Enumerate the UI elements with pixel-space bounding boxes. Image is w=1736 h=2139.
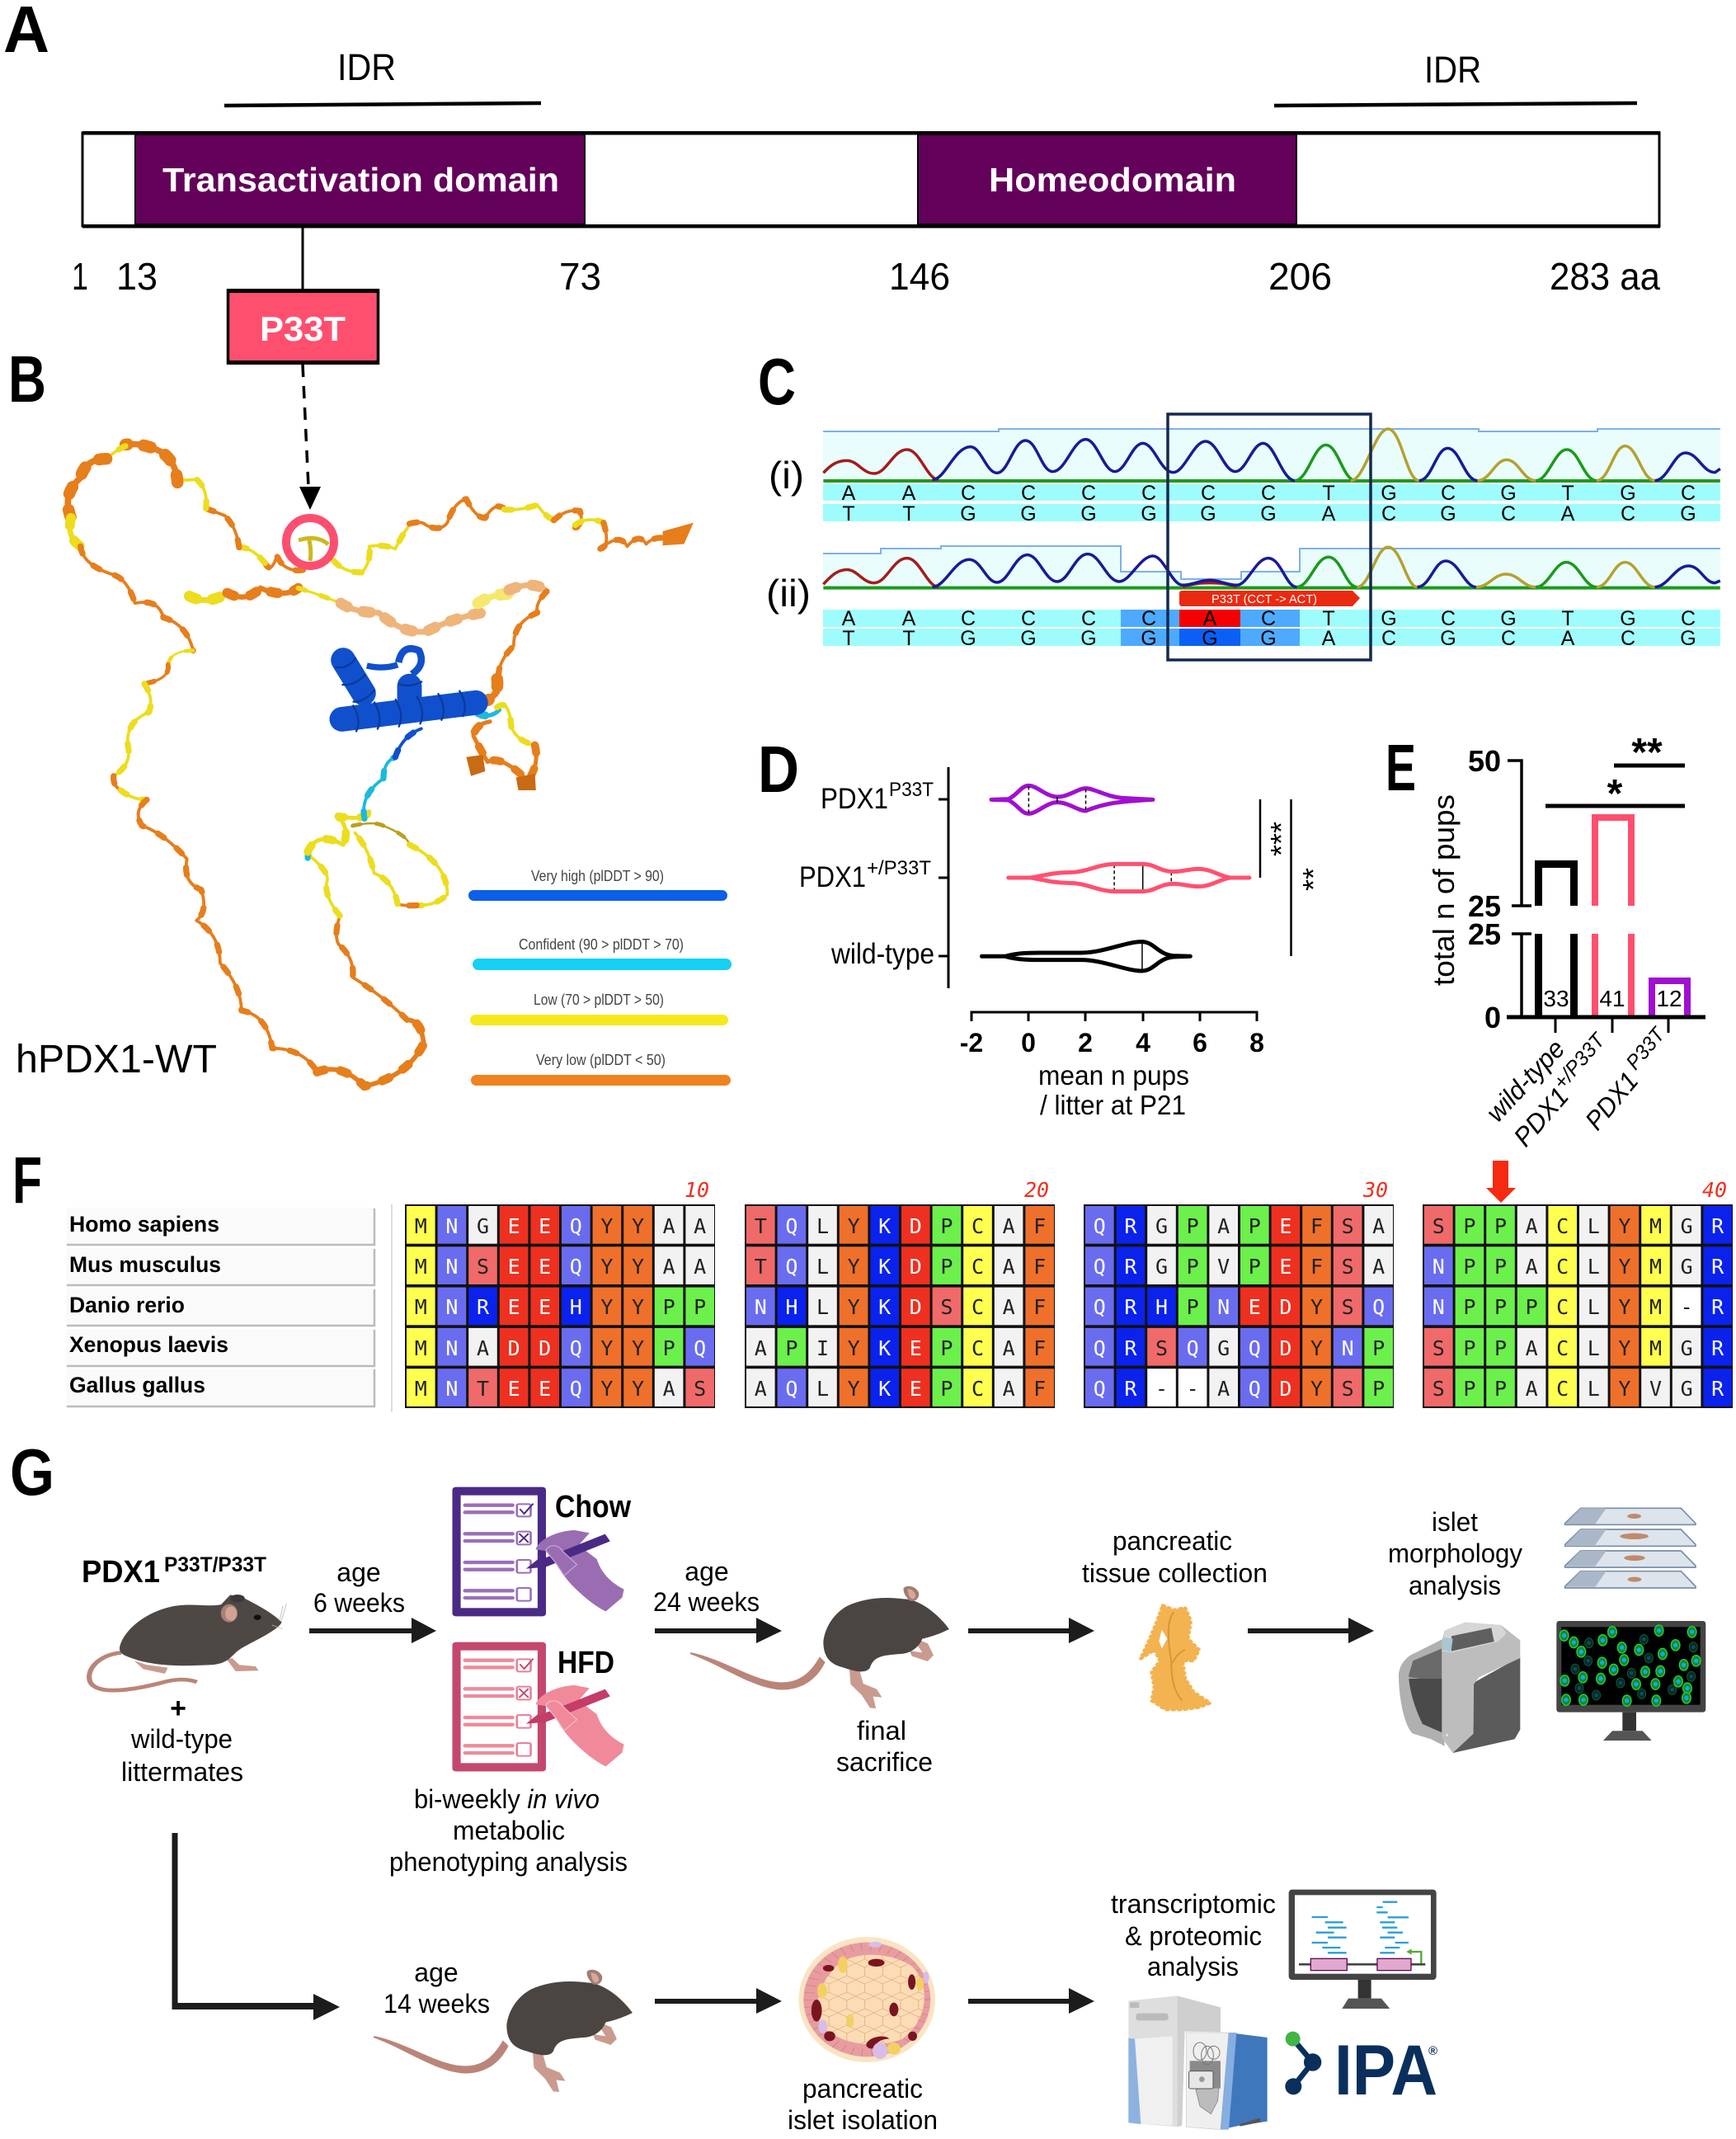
phenotyping caption: metabolic [453,1816,565,1845]
wild-type chromatogram (i): AACCCCCCTGCGTGC [842,482,1696,505]
residue numbers: 146 [889,255,950,298]
wild-type caption: littermates [121,1757,243,1787]
position numbers: 30 [1362,1178,1388,1202]
residue numbers: 73 [559,255,601,298]
panel letter F: F [12,1143,42,1217]
significance lines: ** [1631,731,1663,775]
wild-type caption: wild-type [130,1724,233,1754]
alignment block residues 11-20: T Q LY KD PCAF [755,1255,1046,1279]
domain bar: Homeodomain [989,161,1236,199]
P33T mutation box [227,228,379,365]
alignment block residues 1-10: M N G EEQ YYAA [415,1214,706,1238]
icon: HFD clipboard [452,1642,624,1771]
rotated group labels: PDX1 [1508,1081,1575,1152]
panel B: predicted protein structure [8,342,732,1086]
position numbers: 40 [1702,1178,1727,1202]
bar values: 12 [1656,986,1682,1011]
alignment block residues 21-30: QR --A QD YSP [1094,1377,1385,1401]
alignment block residues 21-30: QR GPVP E FSA [1094,1255,1385,1279]
tissue collection caption: pancreatic [1113,1526,1232,1556]
panel F: sequence alignment [12,1143,1733,1412]
IDR label right [1274,49,1637,106]
wild-type chromatogram (i): TTGGGGGGACGCACG [842,502,1696,525]
rotated group labels: P33T [1618,1022,1670,1078]
alignment block residues 1-10: M N S EEQ YYAA [415,1255,706,1279]
islet morphology caption [1388,1507,1522,1600]
P33T mutation box: P33T [260,309,346,348]
omics caption [1111,1889,1276,1981]
alignment block residues 11-20: APIY KE PCAF [755,1336,1046,1360]
IPA logo [1285,2031,1437,2110]
alignment block residues 31-40 [1423,1204,1733,1408]
alignment block residues 31-40: N PPACLYMG R [1433,1255,1724,1279]
category labels: P33T [889,779,934,801]
alignment block residues 1-10: M NREEH YYPP [415,1295,706,1319]
position numbers [685,1178,1727,1202]
category labels: wild-type [830,938,934,970]
wild-type caption: + [170,1693,186,1724]
age 6 weeks label: age [336,1557,381,1587]
tissue collection caption [1082,1526,1268,1588]
icon: sacrificed mouse [690,1586,949,1708]
panel G: experimental workflow [10,1435,1705,2135]
panel letter D: D [758,733,799,806]
icon: lower mouse [374,1970,633,2092]
final sacrifice caption [836,1716,933,1777]
age 6 weeks label: 6 weeks [313,1588,405,1618]
genotype label [82,1553,266,1590]
final sacrifice caption: final [857,1716,906,1746]
pLDDT legend: Confident (90 > plDDT > 70) [519,936,684,953]
alignment block residues 21-30 [1084,1204,1394,1408]
species names: Xenopus laevis [69,1332,228,1357]
axes [939,767,1264,1058]
category labels [799,779,934,970]
panel C: chromatograms [758,345,1720,660]
age 14 weeks label: age [414,1958,459,1987]
dashed arrow to P33T site [299,365,321,510]
arrow [655,1618,782,1643]
genotype label: PDX1 [82,1555,160,1590]
icon: chow clipboard [452,1487,624,1616]
arrow [655,1988,782,2014]
domain bar: Transactivation domain [162,161,559,199]
icon: pancreatic islet [798,1937,935,2062]
broken y axis: 25 [1468,917,1501,951]
HFD label: HFD [557,1646,614,1680]
alignment block residues 21-30: QR S Q G QD Y N P [1094,1336,1385,1360]
rotated group labels: wild-type [1480,1034,1570,1128]
x axis title: mean n pups [1038,1060,1189,1091]
phenotyping caption [389,1784,628,1877]
residue numbers [72,255,1660,298]
arrow [309,1618,436,1643]
residue numbers: 1 [72,255,88,298]
rotated group labels: PDX1 [1579,1063,1646,1135]
mutant chromatogram (ii) [823,546,1720,650]
position numbers: 20 [1024,1178,1049,1202]
significance brackets: *** [1264,822,1298,856]
axes: -2 [960,1028,983,1058]
wild-type chromatogram (i) [823,429,1720,525]
islet isolation caption [788,2074,938,2135]
IPA logo: ® [1428,2044,1437,2058]
bar values: 33 [1543,986,1569,1011]
broken y axis: 25 [1468,889,1501,923]
age 6 weeks label [313,1557,405,1618]
residue numbers: 206 [1268,255,1332,298]
violins [981,785,1249,971]
IDR label right: IDR [1424,49,1481,91]
significance brackets [1260,799,1330,956]
x axis title: / litter at P21 [1040,1090,1186,1120]
category labels: PDX1 [799,861,866,893]
rotated group labels: +/P33T [1549,1028,1611,1094]
alignment block residues 11-20 [745,1204,1055,1408]
age 14 weeks label: 14 weeks [383,1989,490,2019]
bar values: 41 [1599,986,1625,1011]
phenotyping caption: bi-weekly in vivo [414,1784,600,1814]
age 24 weeks label [653,1557,760,1617]
red arrow at residue 33 [1486,1161,1516,1203]
alignment block residues 31-40: SPPACLYMG R [1433,1336,1724,1360]
icon: slide scanner [1399,1623,1520,1753]
species names: Gallus gallus [69,1373,205,1397]
omics caption: analysis [1147,1952,1239,1981]
x axis title [1038,1060,1189,1120]
axes: 8 [1249,1028,1264,1058]
alignment block residues 1-10 [405,1204,715,1408]
protein ribbon [68,444,694,1086]
structure name: hPDX1-WT [16,1038,217,1081]
pLDDT legend: Low (70 > plDDT > 50) [534,992,664,1008]
panel D: violin plot [758,733,1330,1120]
omics caption: & proteomic [1125,1921,1262,1951]
arrow [968,1988,1094,2014]
significance lines [1545,731,1685,816]
icon: standing mouse [89,1595,286,1690]
rotated group labels [1480,1022,1678,1152]
icon: sequencing monitor [1289,1890,1437,2009]
arrow [1248,1618,1374,1643]
panel letter E: E [1386,731,1416,804]
icon: histology slides [1565,1508,1696,1588]
panel letter B: B [8,342,46,416]
IPA logo: IPA [1334,2031,1437,2110]
broken y axis: 0 [1484,1001,1501,1034]
pLDDT legend: Very high (plDDT > 90) [531,868,664,884]
x axis [1507,1015,1705,1020]
species names: Danio rerio [69,1293,185,1317]
arrow [968,1618,1094,1643]
islet morphology caption: islet [1432,1507,1478,1537]
panel letter C: C [758,345,796,418]
position numbers: 10 [685,1178,709,1202]
icon: mass spectrometer [1128,1995,1268,2130]
trace label (i): (i) [769,454,804,497]
alignment block residues 21-30: QR GPAP E FSA [1094,1214,1385,1238]
icon: fluorescence monitor [1556,1621,1705,1741]
alignment block residues 31-40: SPPACLYVG R [1433,1377,1724,1401]
islet isolation caption: pancreatic [802,2074,923,2104]
age 24 weeks label: age [685,1557,729,1586]
wild-type caption [121,1693,243,1787]
bar values [1543,986,1682,1011]
L-shaped arrow to lower path [172,1833,340,2020]
axes: 0 [1021,1028,1036,1058]
panel A: protein domain map [3,0,1660,365]
pLDDT legend [468,868,732,1086]
islet morphology caption: analysis [1409,1571,1501,1600]
alignment block residues 11-20: A Q LY KE PCAF [755,1377,1046,1401]
chow label: Chow [555,1490,631,1524]
tissue collection caption: tissue collection [1082,1558,1268,1588]
age 14 weeks label [383,1958,490,2019]
omics caption: transcriptomic [1111,1889,1276,1919]
y axis title: total n of pups [1427,794,1461,986]
P33T annotation arrow: P33T (CCT -> ACT) [1211,592,1317,606]
icon: pancreas [1141,1605,1210,1710]
genotype label: P33T/P33T [164,1553,266,1576]
category labels: PDX1 [821,783,888,815]
IDR label left [224,46,541,106]
bars [1535,814,1691,1017]
species names [66,1204,392,1412]
highlight box [1168,414,1371,660]
residue numbers: 13 [116,255,158,298]
phenotyping caption: phenotyping analysis [389,1847,628,1877]
mutant chromatogram (ii): AACCCCACTGCGTGC [842,607,1696,630]
species names: Homo sapiens [69,1212,219,1237]
domain bar [82,131,1660,228]
P33T annotation arrow [1179,591,1360,606]
trace label (ii): (ii) [766,572,811,615]
islet isolation caption: islet isolation [788,2105,938,2135]
panel E: bar chart total pups [1386,731,1705,1152]
species names: Mus musculus [69,1252,221,1277]
residue numbers: 283 aa [1550,255,1660,298]
P33T site circle [286,518,334,566]
alignment block residues 31-40: SPPACLYMG R [1433,1214,1724,1238]
mutant chromatogram (ii): TTGGGGGGACGCACG [842,627,1696,650]
category labels: +/P33T [867,857,931,879]
significance lines: * [1607,772,1623,816]
axes: 2 [1078,1028,1093,1058]
alignment block residues 21-30: QRH P NED YS Q [1094,1295,1385,1319]
broken y axis: 50 [1468,744,1501,778]
axis ticks [1555,1017,1668,1033]
alignment block residues 11-20: NH LY KD SCAF [755,1295,1046,1319]
age 24 weeks label: 24 weeks [653,1587,760,1617]
alignment block residues 1-10: M N T EEQ YYAS [415,1377,706,1401]
islet morphology caption: morphology [1388,1538,1522,1568]
panel letter G: G [10,1435,54,1509]
final sacrifice caption: sacrifice [836,1747,933,1777]
broken y axis [1468,744,1531,1034]
pLDDT legend: Very low (plDDT < 50) [536,1052,666,1068]
axes: 6 [1193,1028,1207,1058]
significance brackets: ** [1296,868,1330,891]
alignment block residues 11-20: T Q LY KD PCAF [755,1214,1046,1238]
IDR label left: IDR [337,46,396,88]
alignment block residues 1-10: M N A DDQ YYP Q [415,1336,706,1360]
alignment block residues 31-40: N PPPCLYM- R [1433,1295,1724,1319]
axes: 4 [1136,1028,1150,1058]
